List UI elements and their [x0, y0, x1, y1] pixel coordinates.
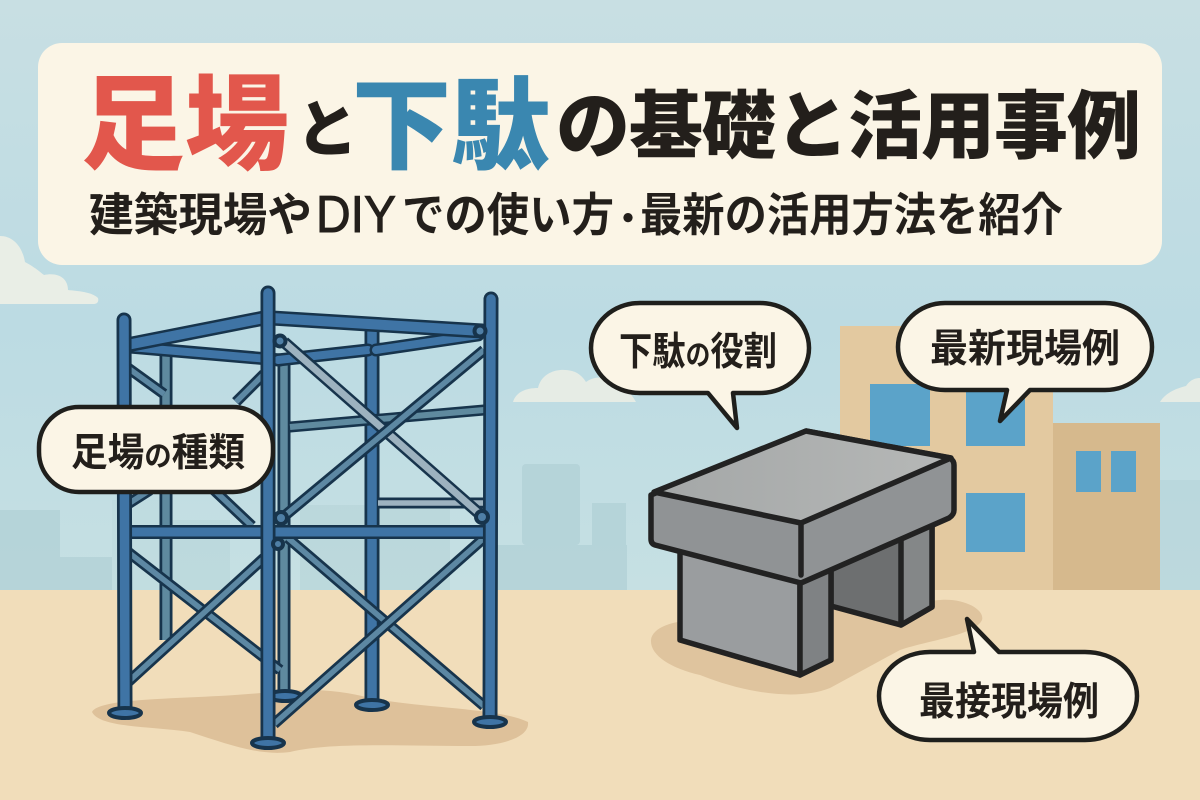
- cross braces right: [274, 342, 484, 724]
- block shadow: [651, 600, 982, 694]
- rear inner posts: [166, 332, 388, 710]
- bubble: role of geta: 下駄の役割: [619, 331, 777, 374]
- scaffold shadow: [92, 690, 528, 753]
- front posts: [109, 293, 506, 748]
- subtitle: DIY: [316, 186, 396, 244]
- cloud: right: [1160, 378, 1200, 402]
- bubble: types of scaffolding: 足場の種類: [71, 432, 245, 475]
- bubble: nearest site examples: [879, 619, 1137, 740]
- bubble: types of scaffolding: [39, 407, 273, 492]
- bubble: nearest site examples: 最接現場例: [919, 681, 1099, 724]
- skyline silhouette: [0, 464, 1200, 590]
- subtitle: ・: [610, 198, 646, 239]
- subtitle: [89, 186, 1063, 244]
- sky background: [0, 0, 1200, 592]
- title panel: [38, 43, 1162, 265]
- top rails rear: [130, 335, 478, 360]
- title: と: [296, 96, 358, 165]
- front leg: [680, 550, 831, 675]
- title: の基礎と活用事例: [556, 85, 1141, 168]
- subtitle: での使い方: [402, 189, 614, 241]
- concrete block: [651, 431, 954, 675]
- building: tall: [840, 326, 1053, 590]
- cloud: left: [0, 236, 98, 304]
- title: [81, 68, 1141, 184]
- subtitle: 最新の活用方法を紹介: [640, 189, 1063, 241]
- deck: [651, 431, 954, 583]
- clamps: [273, 326, 488, 549]
- mid ledgers: [290, 410, 484, 503]
- bubble: role of geta: [591, 303, 809, 428]
- bubble: latest site examples: [898, 303, 1152, 421]
- scaffold frame: [109, 293, 506, 748]
- building: short: [1053, 423, 1160, 590]
- bubble: latest site examples: 最新現場例: [930, 328, 1120, 371]
- rear leg: [831, 515, 932, 625]
- title: 足場: [81, 68, 289, 184]
- cloud: centre: [513, 370, 636, 402]
- side braces: [128, 368, 280, 682]
- subtitle: 建築現場や: [89, 189, 312, 241]
- top rails front: [127, 318, 482, 345]
- title: 下駄: [352, 71, 550, 183]
- ground: [0, 590, 1200, 800]
- main mid rail: [127, 525, 485, 539]
